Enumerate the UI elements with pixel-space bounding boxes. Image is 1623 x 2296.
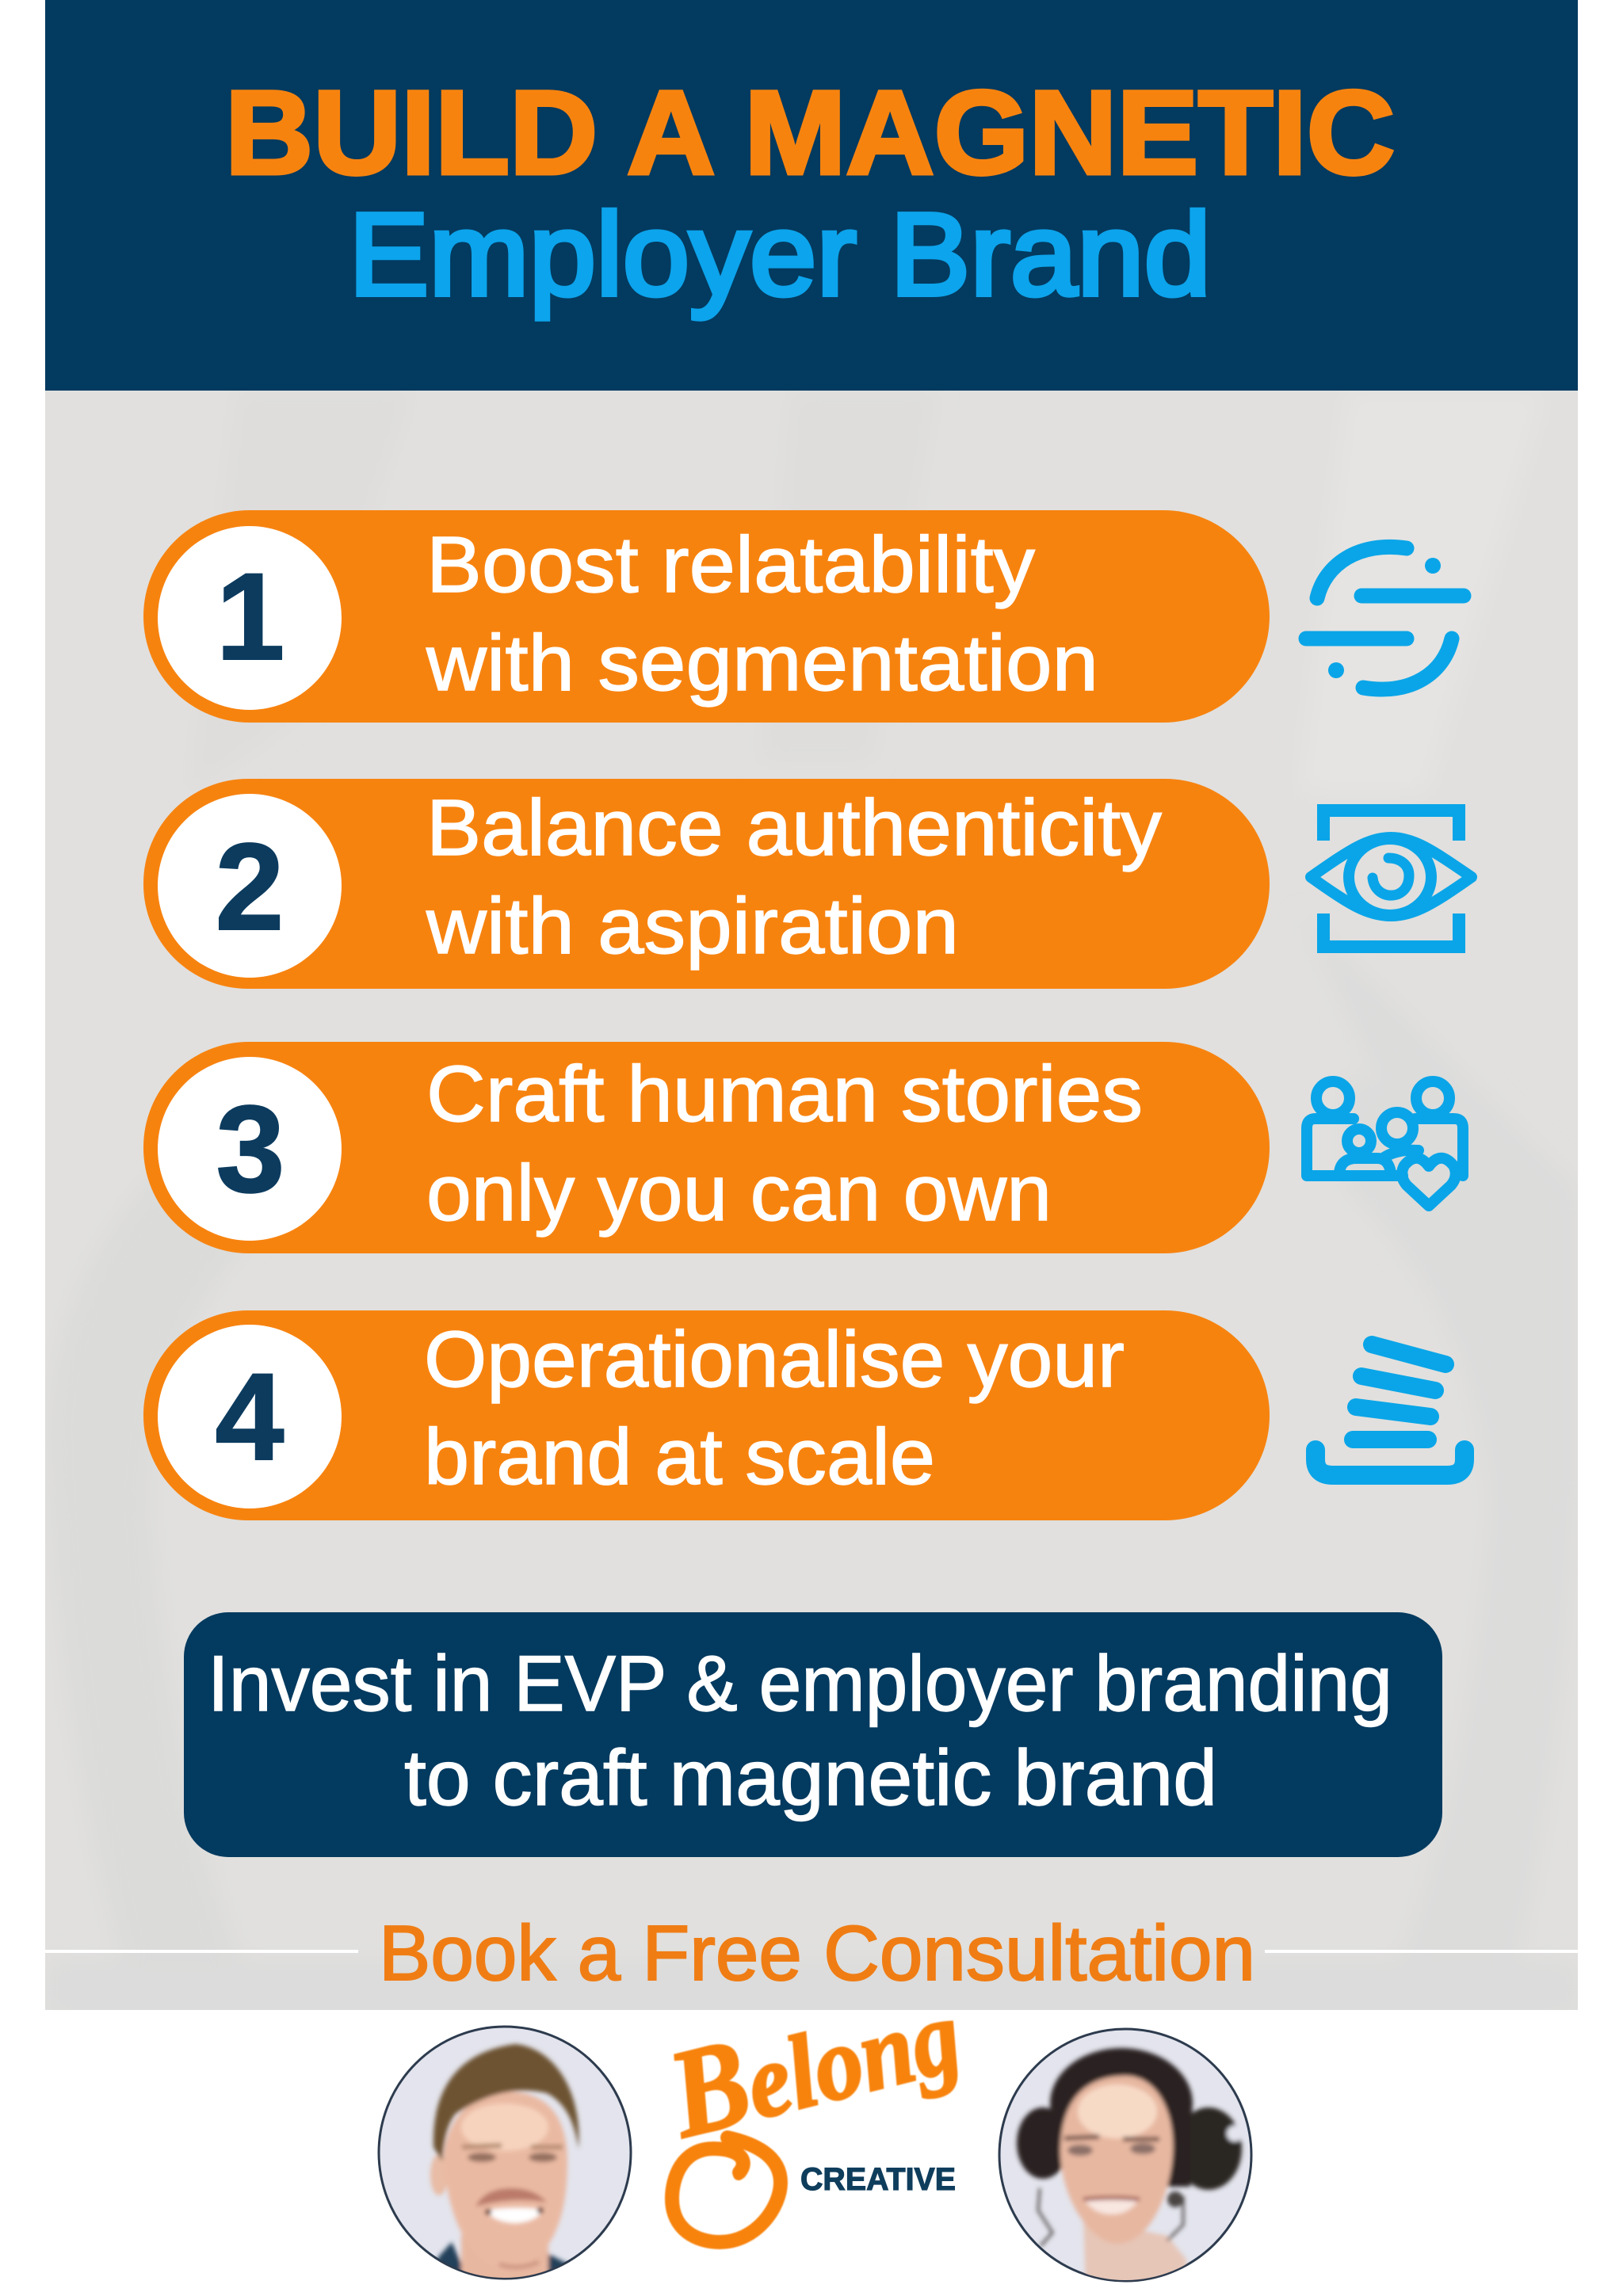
step 2 text: Balance authenticity — [426, 784, 1162, 872]
step 4 text: Operationalise your — [424, 1315, 1125, 1404]
callout: invest in EVP: Invest in EVP & employer branding — [208, 1639, 1392, 1727]
icon: family with heart — [1307, 1081, 1463, 1206]
portrait: woman — [999, 2029, 1251, 2286]
number badge 4: 4 — [216, 1348, 284, 1486]
step 2 text: with aspiration — [426, 882, 959, 971]
number badge 1 — [158, 526, 342, 710]
title line 2: Employer Brand — [349, 189, 1211, 320]
number badge 3: 3 — [216, 1081, 285, 1219]
title line 1: BUILD A MAGNETIC — [225, 66, 1395, 199]
step 3 text — [426, 1050, 1143, 1238]
step 4 text — [424, 1315, 1125, 1501]
callout: invest in EVP: to craft magnetic brand — [404, 1733, 1217, 1821]
step 1 text: with segmentation — [426, 619, 1098, 707]
callout: invest in EVP — [184, 1612, 1442, 1857]
step 4 text: brand at scale — [424, 1413, 935, 1501]
call to action: book a consultation — [45, 1909, 1578, 1997]
icon: eye scan — [1311, 810, 1472, 947]
icon: segmentation — [1306, 547, 1464, 689]
panel: step 1 — [143, 510, 1270, 723]
panel: step 4 — [143, 1310, 1270, 1520]
step 2 text — [426, 784, 1162, 971]
step 1 text: Boost relatability — [426, 521, 1035, 609]
number badge 2: 2 — [216, 818, 284, 956]
number badge 2 — [158, 794, 342, 978]
logo subtitle: CREATIVE — [800, 2162, 956, 2197]
logo: Belong Creative: Belong — [655, 1959, 973, 2164]
panel: step 2 — [143, 779, 1270, 989]
step 3 text: Craft human stories — [426, 1050, 1143, 1138]
panel: grey background — [45, 391, 1578, 2016]
number badge 4 — [158, 1325, 342, 1508]
step 3 text: only you can own — [426, 1149, 1052, 1238]
panel: step 3 — [143, 1042, 1270, 1253]
number badge 1: 1 — [216, 548, 285, 686]
icon: stacked layers in tray — [1316, 1344, 1465, 1475]
call to action: book a consultation: Book a Free Consultation — [379, 1909, 1255, 1997]
step 1 text — [426, 521, 1098, 707]
header band — [45, 0, 1578, 391]
logo: Belong Creative — [655, 1959, 973, 2242]
portrait: man — [379, 2027, 631, 2282]
number badge 3 — [158, 1057, 342, 1241]
